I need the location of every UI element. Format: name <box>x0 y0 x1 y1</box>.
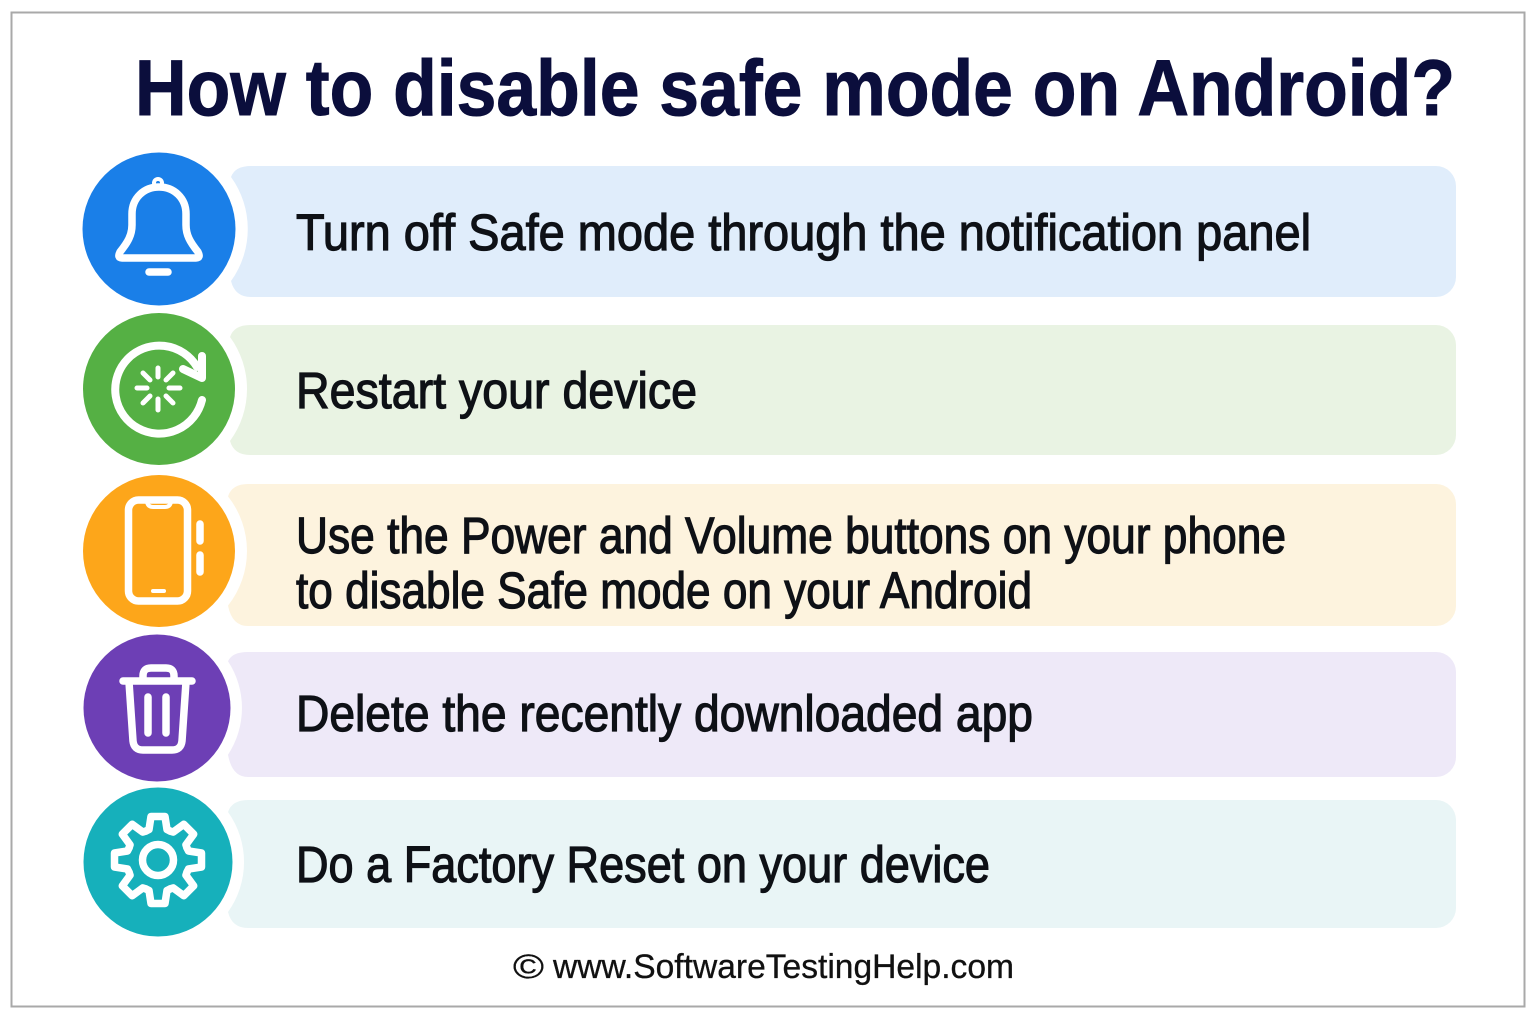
panel: restart step <box>83 313 1456 465</box>
icon: trash can <box>84 634 230 782</box>
panel background <box>228 800 1456 928</box>
step text: Do a Factory Reset on your device <box>296 836 990 893</box>
footer credit: © <box>513 948 544 986</box>
step text <box>296 507 1286 619</box>
step text: Restart your device <box>296 362 697 419</box>
footer credit: www.SoftwareTestingHelp.com <box>552 948 1014 986</box>
step text: Use the Power and Volume buttons on your phone <box>296 507 1286 564</box>
panel: factory reset step <box>84 788 1456 936</box>
icon: gear <box>84 788 232 936</box>
step text: Turn off Safe mode through the notification panel <box>296 204 1311 261</box>
panel background <box>228 484 1456 626</box>
panel background <box>228 652 1456 777</box>
icon: phone <box>83 475 235 627</box>
step text: to disable Safe mode on your Android <box>296 562 1032 619</box>
panel background <box>230 325 1456 455</box>
icon: restart <box>83 313 235 465</box>
step text: Delete the recently downloaded app <box>296 685 1033 742</box>
panel background <box>231 166 1456 297</box>
icon: bell <box>82 152 236 306</box>
panel: power and volume buttons step <box>83 475 1456 627</box>
panel: delete app step <box>84 634 1456 782</box>
panel: notification panel step <box>82 152 1456 306</box>
